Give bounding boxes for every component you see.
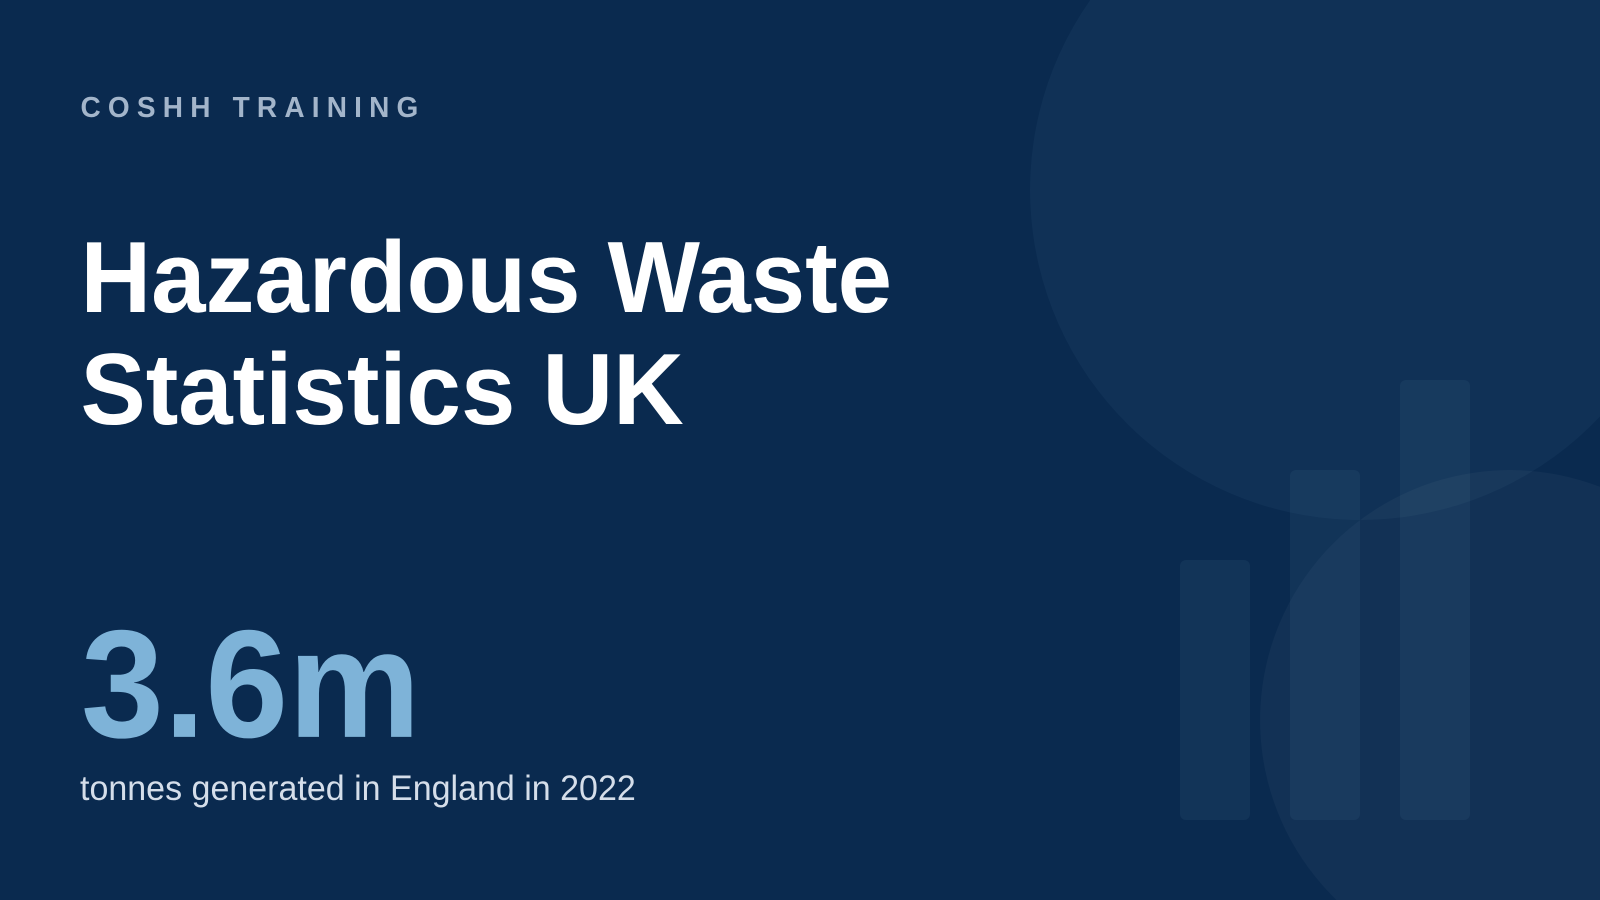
circle: lower right [1260,470,1600,900]
title [80,220,892,446]
icon: bar chart [1180,380,1470,820]
eyebrow label: COSHH TRAINING [80,91,426,123]
statistic caption: tonnes generated in England in 2022 [80,769,636,808]
big statistic: 3.6m [81,598,421,770]
circle: upper right [1030,0,1600,520]
title: Hazardous Waste [80,220,892,334]
title: Statistics UK [80,332,684,446]
